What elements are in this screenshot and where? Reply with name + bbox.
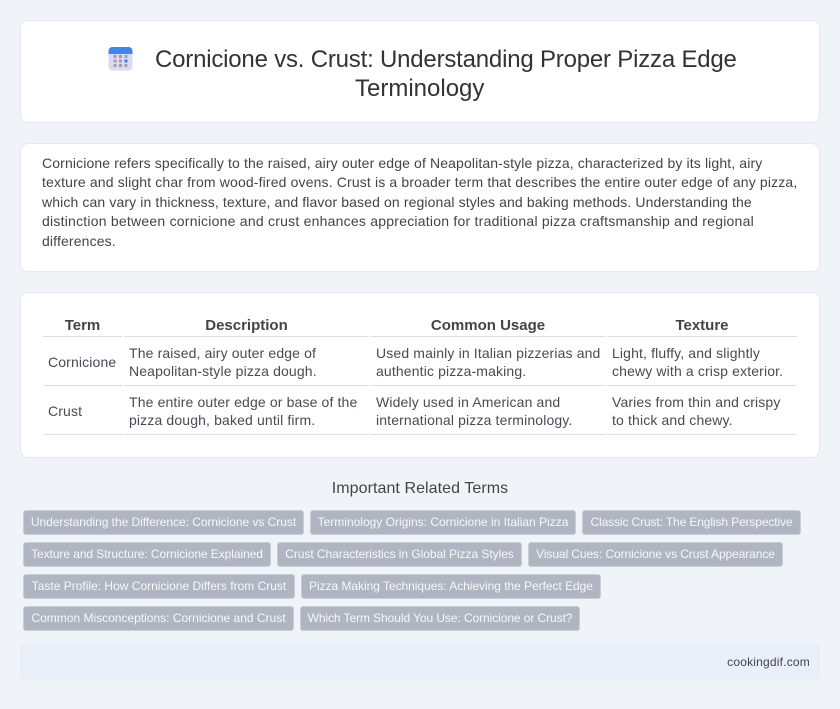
- tag list: Taste Profile: How Cornicione Differs from Crust: [32, 579, 286, 593]
- comparison table: The entire outer edge or base of the: [129, 394, 357, 410]
- intro text: differences.: [42, 233, 116, 249]
- comparison table: The raised, airy outer edge of: [129, 345, 316, 361]
- comparison table: Common Usage: [431, 317, 545, 334]
- comparison table: Varies from thin and crispy: [612, 394, 780, 410]
- comparison table: authentic pizza-making.: [376, 363, 526, 379]
- tag list: Texture and Structure: Cornicione Explained: [31, 547, 263, 561]
- tag list: Visual Cues: Cornicione vs Crust Appearance: [536, 547, 775, 561]
- comparison table: Neapolitan-style pizza dough.: [129, 363, 317, 379]
- comparison table: pizza dough, baked until firm.: [129, 412, 315, 428]
- comparison table: Description: [205, 317, 288, 334]
- comparison table: chewy with a crisp exterior.: [612, 363, 783, 379]
- comparison table: Texture: [675, 317, 729, 334]
- tag list: Common Misconceptions: Cornicione and Crust: [31, 611, 286, 625]
- comparison table: Widely used in American and: [376, 394, 560, 410]
- comparison table: international pizza terminology.: [376, 412, 572, 428]
- tag list: Crust Characteristics in Global Pizza Styles: [285, 547, 514, 561]
- tag list: Classic Crust: The English Perspective: [591, 515, 792, 529]
- comparison table: to thick and chewy.: [612, 412, 733, 428]
- comparison table: Cornicione: [48, 354, 116, 370]
- intro text: [42, 155, 797, 249]
- tag list: Terminology Origins: Cornicione in Italian Pizza: [318, 515, 568, 529]
- heading: related terms: Important Related Terms: [332, 480, 508, 497]
- tag list: [23, 510, 801, 631]
- comparison table: Term: [65, 317, 100, 334]
- intro text: distinction between cornicione and crust enhances appreciation for traditional pizza craftsmanship and regional: [42, 213, 754, 229]
- panel: comparison table: [20, 292, 820, 458]
- intro text: Cornicione refers specifically to the raised, airy outer edge of Neapolitan-style pizza, characterized by its light, airy: [42, 155, 762, 171]
- footer credit: cookingdif.com: [727, 655, 810, 669]
- title: Terminology: [355, 75, 484, 102]
- panel: header: [20, 20, 820, 123]
- comparison table: Used mainly in Italian pizzerias and: [376, 345, 600, 361]
- panel: intro paragraph: [20, 143, 820, 272]
- icon: calendar: [108, 47, 132, 70]
- title: Cornicione vs. Crust: Understanding Proper Pizza Edge: [155, 46, 737, 73]
- footer bar: [20, 645, 820, 679]
- comparison table: Light, fluffy, and slightly: [612, 345, 760, 361]
- comparison table: Crust: [48, 403, 82, 419]
- tag list: Which Term Should You Use: Cornicione or Crust?: [308, 611, 572, 625]
- tag list: Pizza Making Techniques: Achieving the Perfect Edge: [309, 579, 593, 593]
- tag list: Understanding the Difference: Cornicione vs Crust: [31, 515, 296, 529]
- intro text: which can vary in thickness, texture, and flavor based on regional styles and baking methods. Understanding the: [42, 194, 752, 210]
- title: [155, 46, 737, 102]
- comparison table: [43, 317, 797, 435]
- intro text: texture and slight char from wood-fired ovens. Crust is a broader term that describes the entire outer edge of any pizza,: [42, 174, 797, 190]
